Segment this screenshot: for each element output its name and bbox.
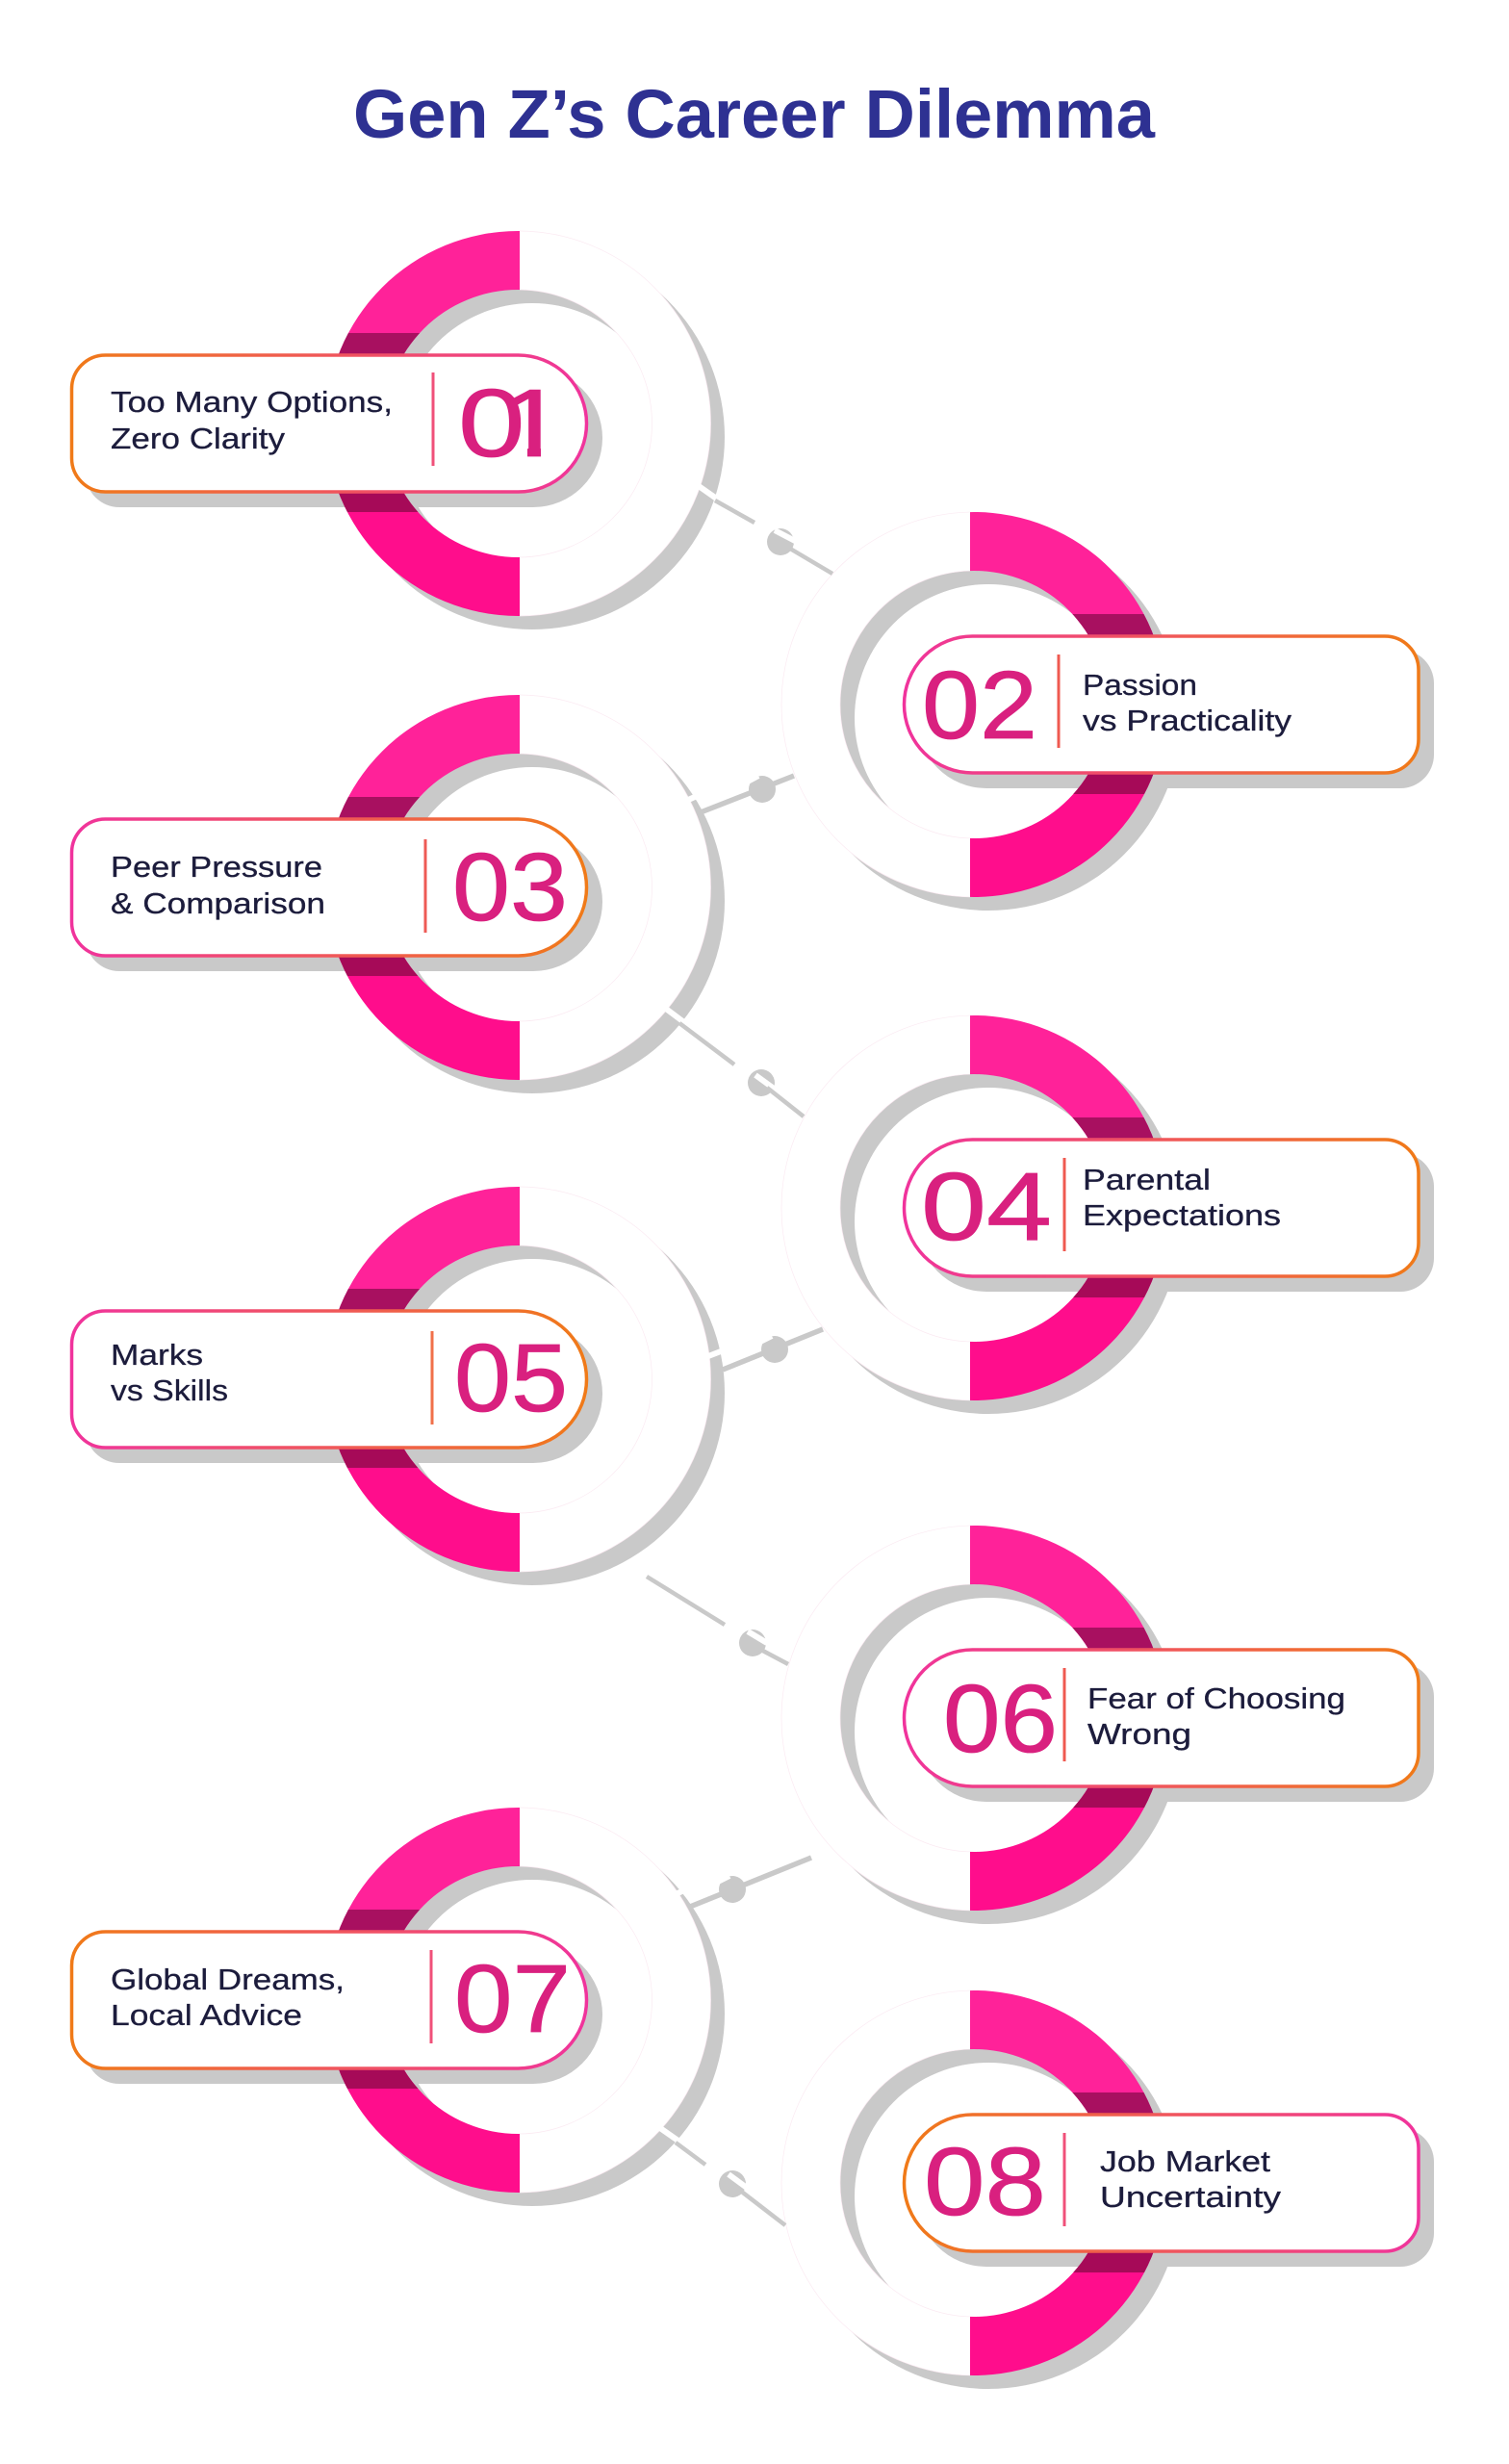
divider 06 (1062, 1668, 1066, 1761)
divider 03 (423, 839, 427, 933)
label pill 08 (905, 2115, 1419, 2251)
connector 2 to 3 (686, 776, 794, 812)
text 07: Global Dreams, (111, 1963, 345, 1996)
text 05: vs Skills (111, 1373, 228, 1407)
number 04: 04 (921, 1153, 1052, 1261)
text 02: Passion (1083, 668, 1197, 702)
number 05: 05 (454, 1324, 568, 1432)
text 02: vs Practicality (1083, 704, 1292, 737)
text 07 (111, 1963, 345, 2032)
connector 1 to 2 (699, 486, 832, 574)
text 06: Wrong (1087, 1717, 1191, 1751)
label pill 05 (71, 1311, 587, 1448)
connector 3 to 4 (666, 1009, 804, 1116)
text 01 (111, 385, 393, 455)
text 06 (1087, 1681, 1345, 1751)
connector 6 to 7 (676, 1858, 811, 1907)
label pill 04 (905, 1140, 1419, 1276)
text 04: Parental (1083, 1163, 1211, 1196)
number 03: 03 (452, 834, 568, 941)
text 07: Local Advice (111, 1998, 302, 2032)
panel: 02 Passion vs Practicality (681, 416, 1434, 993)
panel: 06 Fear of Choosing Wrong (681, 1429, 1434, 2007)
text 04: Expectations (1083, 1198, 1281, 1232)
divider 08 (1062, 2133, 1066, 2226)
text 02 (1083, 668, 1292, 737)
divider 02 (1057, 654, 1061, 748)
text 03 (111, 850, 325, 920)
text 03: Peer Pressure (111, 850, 322, 884)
text 01: Too Many Options, (111, 385, 393, 419)
panel: 07 Global Dreams, Local Advice (71, 1711, 808, 2289)
text 06: Fear of Choosing (1087, 1681, 1345, 1715)
number 01: 1 (498, 369, 567, 477)
text 08: Job Market (1100, 2144, 1270, 2178)
number 06: 06 (943, 1665, 1058, 1773)
text 08: Uncertainty (1100, 2180, 1282, 2214)
text 03: & Comparison (111, 886, 325, 920)
divider 05 (431, 1331, 433, 1424)
number 01: 0 (458, 370, 525, 476)
panel: 01 Too Many Options, Zero Clarity (69, 231, 725, 629)
number 01 (462, 389, 541, 458)
text 05: Marks (111, 1338, 203, 1372)
title: Gen Z’s Career Dilemma (353, 77, 1156, 153)
label pill 02 (905, 636, 1419, 773)
divider 07 (429, 1950, 433, 2043)
panel: 03 Peer Pressure & Comparison (71, 599, 808, 1176)
connector 5 to 6 (647, 1577, 788, 1664)
divider 01 (431, 372, 435, 466)
label pill 06 (905, 1650, 1419, 1786)
number 08: 08 (924, 2128, 1046, 2236)
panel: 04 Parental Expectations (681, 919, 1434, 1497)
panel: 08 Job Market Uncertainty (681, 1894, 1434, 2464)
number 02: 02 (922, 652, 1037, 759)
connector 7 to 8 (660, 2128, 785, 2225)
text 08 (1100, 2144, 1282, 2214)
text 01: Zero Clarity (111, 422, 286, 455)
text 04 (1083, 1163, 1281, 1232)
label pill 03 (71, 819, 587, 956)
text 05 (111, 1338, 228, 1407)
label pill 01 (71, 355, 587, 492)
label pill 07 (71, 1932, 587, 2068)
connector 4 to 5 (708, 1329, 823, 1370)
divider 04 (1062, 1158, 1066, 1251)
panel: 05 Marks vs Skills (71, 1091, 808, 1668)
number 07: 07 (454, 1945, 571, 2053)
